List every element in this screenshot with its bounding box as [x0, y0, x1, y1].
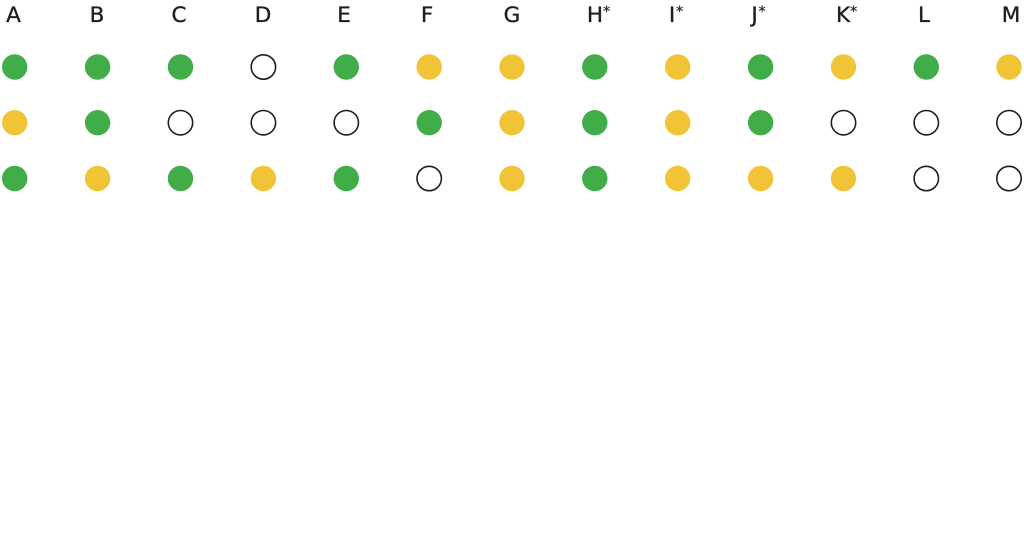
column headers: H — [587, 3, 603, 28]
column headers: A — [6, 3, 21, 28]
column headers: I — [669, 3, 675, 28]
column headers: E — [337, 3, 351, 28]
column headers: K — [836, 3, 851, 28]
column headers: B — [90, 3, 104, 28]
column headers: J — [749, 3, 758, 28]
row 1 dots — [2, 54, 1022, 80]
column headers: C — [171, 3, 187, 28]
column headers: F — [421, 3, 433, 28]
row 2 dots — [2, 110, 1021, 135]
column headers — [6, 3, 1020, 28]
column headers: M — [1002, 3, 1020, 28]
column headers: L — [918, 3, 930, 28]
column headers: * — [603, 4, 610, 20]
column headers: * — [758, 4, 766, 20]
column headers: D — [255, 3, 271, 28]
row 3 dots — [2, 166, 1021, 191]
column headers: G — [504, 3, 520, 28]
column headers: * — [850, 4, 857, 20]
column headers: * — [676, 4, 683, 20]
